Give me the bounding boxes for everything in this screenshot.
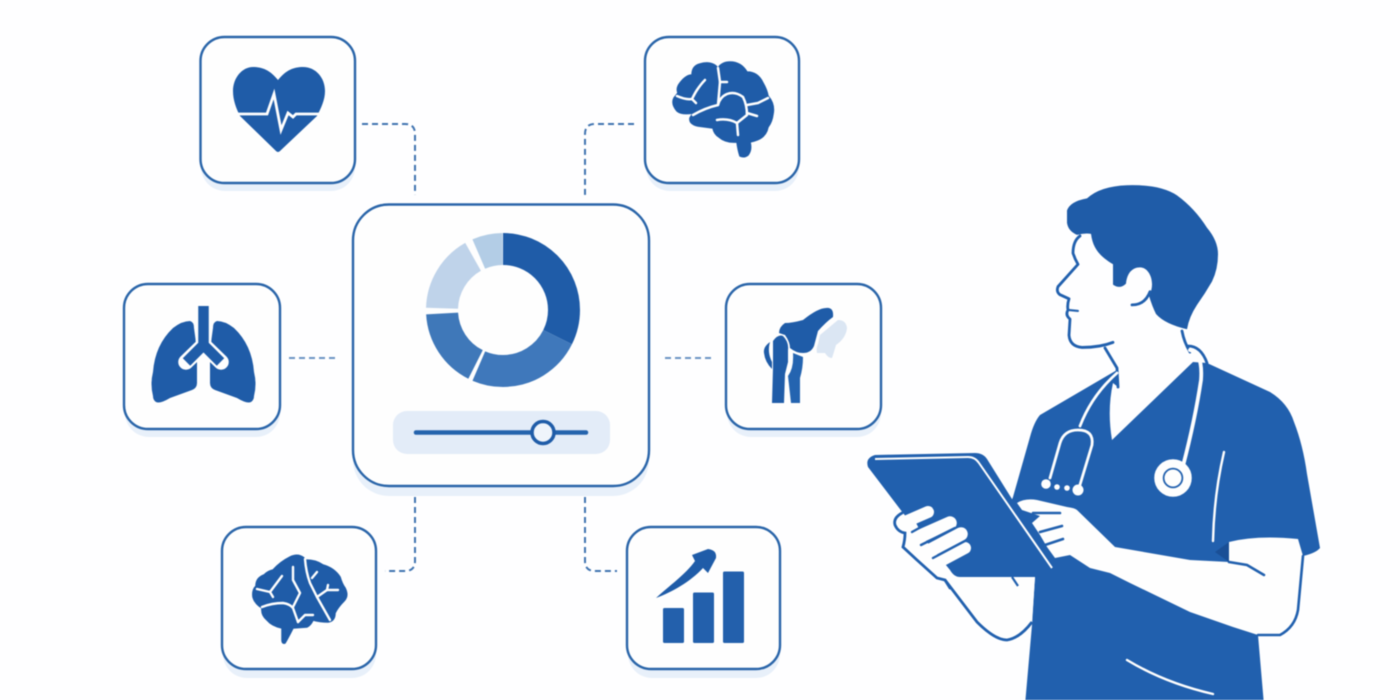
icon: lungs — [152, 306, 256, 402]
connector: upper brain to dashboard — [585, 124, 634, 195]
icon: heart with pulse — [233, 67, 325, 152]
connector: heart to dashboard — [362, 124, 415, 195]
hair — [1067, 185, 1218, 329]
arm outline and finger lines — [1033, 513, 1303, 635]
icon: knee joint — [764, 308, 847, 403]
panel: brain side view — [645, 37, 799, 191]
left hand — [895, 512, 965, 588]
panel: growth chart — [627, 527, 780, 678]
slider control — [393, 411, 610, 454]
panel: heart — [200, 37, 355, 191]
panel: knee joint — [726, 284, 881, 437]
face and neck outline — [1057, 236, 1207, 387]
left forearm outline — [945, 580, 1032, 640]
connector: lower brain to dashboard — [385, 497, 415, 571]
icon: brain — [673, 62, 773, 157]
icon: rising bars and arrow — [656, 549, 744, 643]
panel: lungs — [124, 284, 280, 437]
person: clinician with tablet — [867, 185, 1320, 700]
left forearm — [945, 577, 1035, 640]
panel: central dashboard — [353, 204, 649, 496]
icon: brain with stem — [253, 555, 347, 643]
stethoscope — [1041, 350, 1224, 694]
connector: joint to dashboard — [665, 357, 715, 359]
tablet — [867, 453, 1055, 586]
scrub top — [1000, 362, 1320, 700]
right arm and hand — [1017, 499, 1303, 635]
connector: lungs to dashboard — [289, 357, 338, 359]
brain folds — [257, 559, 338, 622]
donut chart — [442, 249, 564, 371]
seam lines — [1213, 452, 1224, 541]
panel: brain top view — [222, 527, 376, 678]
brain folds — [677, 68, 768, 135]
connector: growth chart to dashboard — [585, 497, 617, 571]
sleeve fold — [1215, 542, 1229, 562]
